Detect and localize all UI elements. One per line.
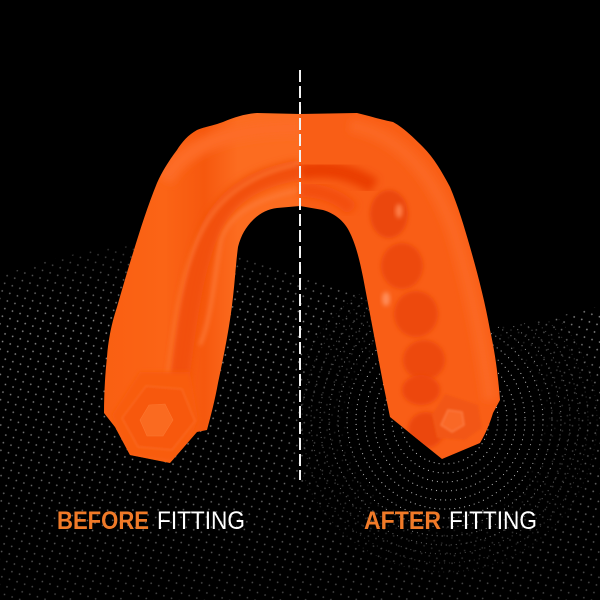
channel highlight short bbox=[200, 190, 300, 345]
tooth impression 3 bbox=[394, 291, 438, 337]
tooth impression 1 bbox=[370, 190, 408, 238]
inner channel shadow bbox=[178, 170, 300, 390]
fitted hexagon centre bbox=[441, 410, 464, 432]
tooth impression 6 bbox=[408, 412, 444, 448]
tooth highlight bbox=[396, 204, 402, 218]
arch lower fade bbox=[300, 190, 352, 210]
arch bite impression bbox=[300, 170, 374, 186]
dashed divider line bbox=[299, 70, 301, 480]
label: after fitting bbox=[364, 507, 537, 535]
dotted wave terrain bbox=[0, 240, 600, 600]
specular highlight bbox=[382, 292, 390, 306]
tooth impression 4 bbox=[403, 340, 445, 380]
tooth impression 2 bbox=[381, 243, 423, 289]
mouthguard after fitting, right half bbox=[300, 100, 510, 470]
hexagon frame bbox=[122, 386, 195, 450]
hexagon centre bbox=[140, 404, 173, 436]
mouthguard photo bbox=[104, 113, 500, 463]
tooth impression 5 bbox=[402, 375, 440, 405]
hexagon outer plate bbox=[112, 372, 198, 462]
channel highlight long bbox=[167, 164, 300, 380]
label: after fitting: AFTER bbox=[364, 507, 441, 535]
label: before fitting: BEFORE bbox=[57, 507, 149, 535]
outer rim light bbox=[350, 125, 490, 400]
label: before fitting bbox=[57, 507, 245, 535]
fitted hexagon bbox=[432, 413, 444, 438]
label: before fitting: FITTING bbox=[157, 507, 245, 535]
label: after fitting: FITTING bbox=[449, 507, 537, 535]
soft top highlight bbox=[165, 128, 300, 180]
mouthguard before fitting, left half bbox=[104, 113, 300, 463]
